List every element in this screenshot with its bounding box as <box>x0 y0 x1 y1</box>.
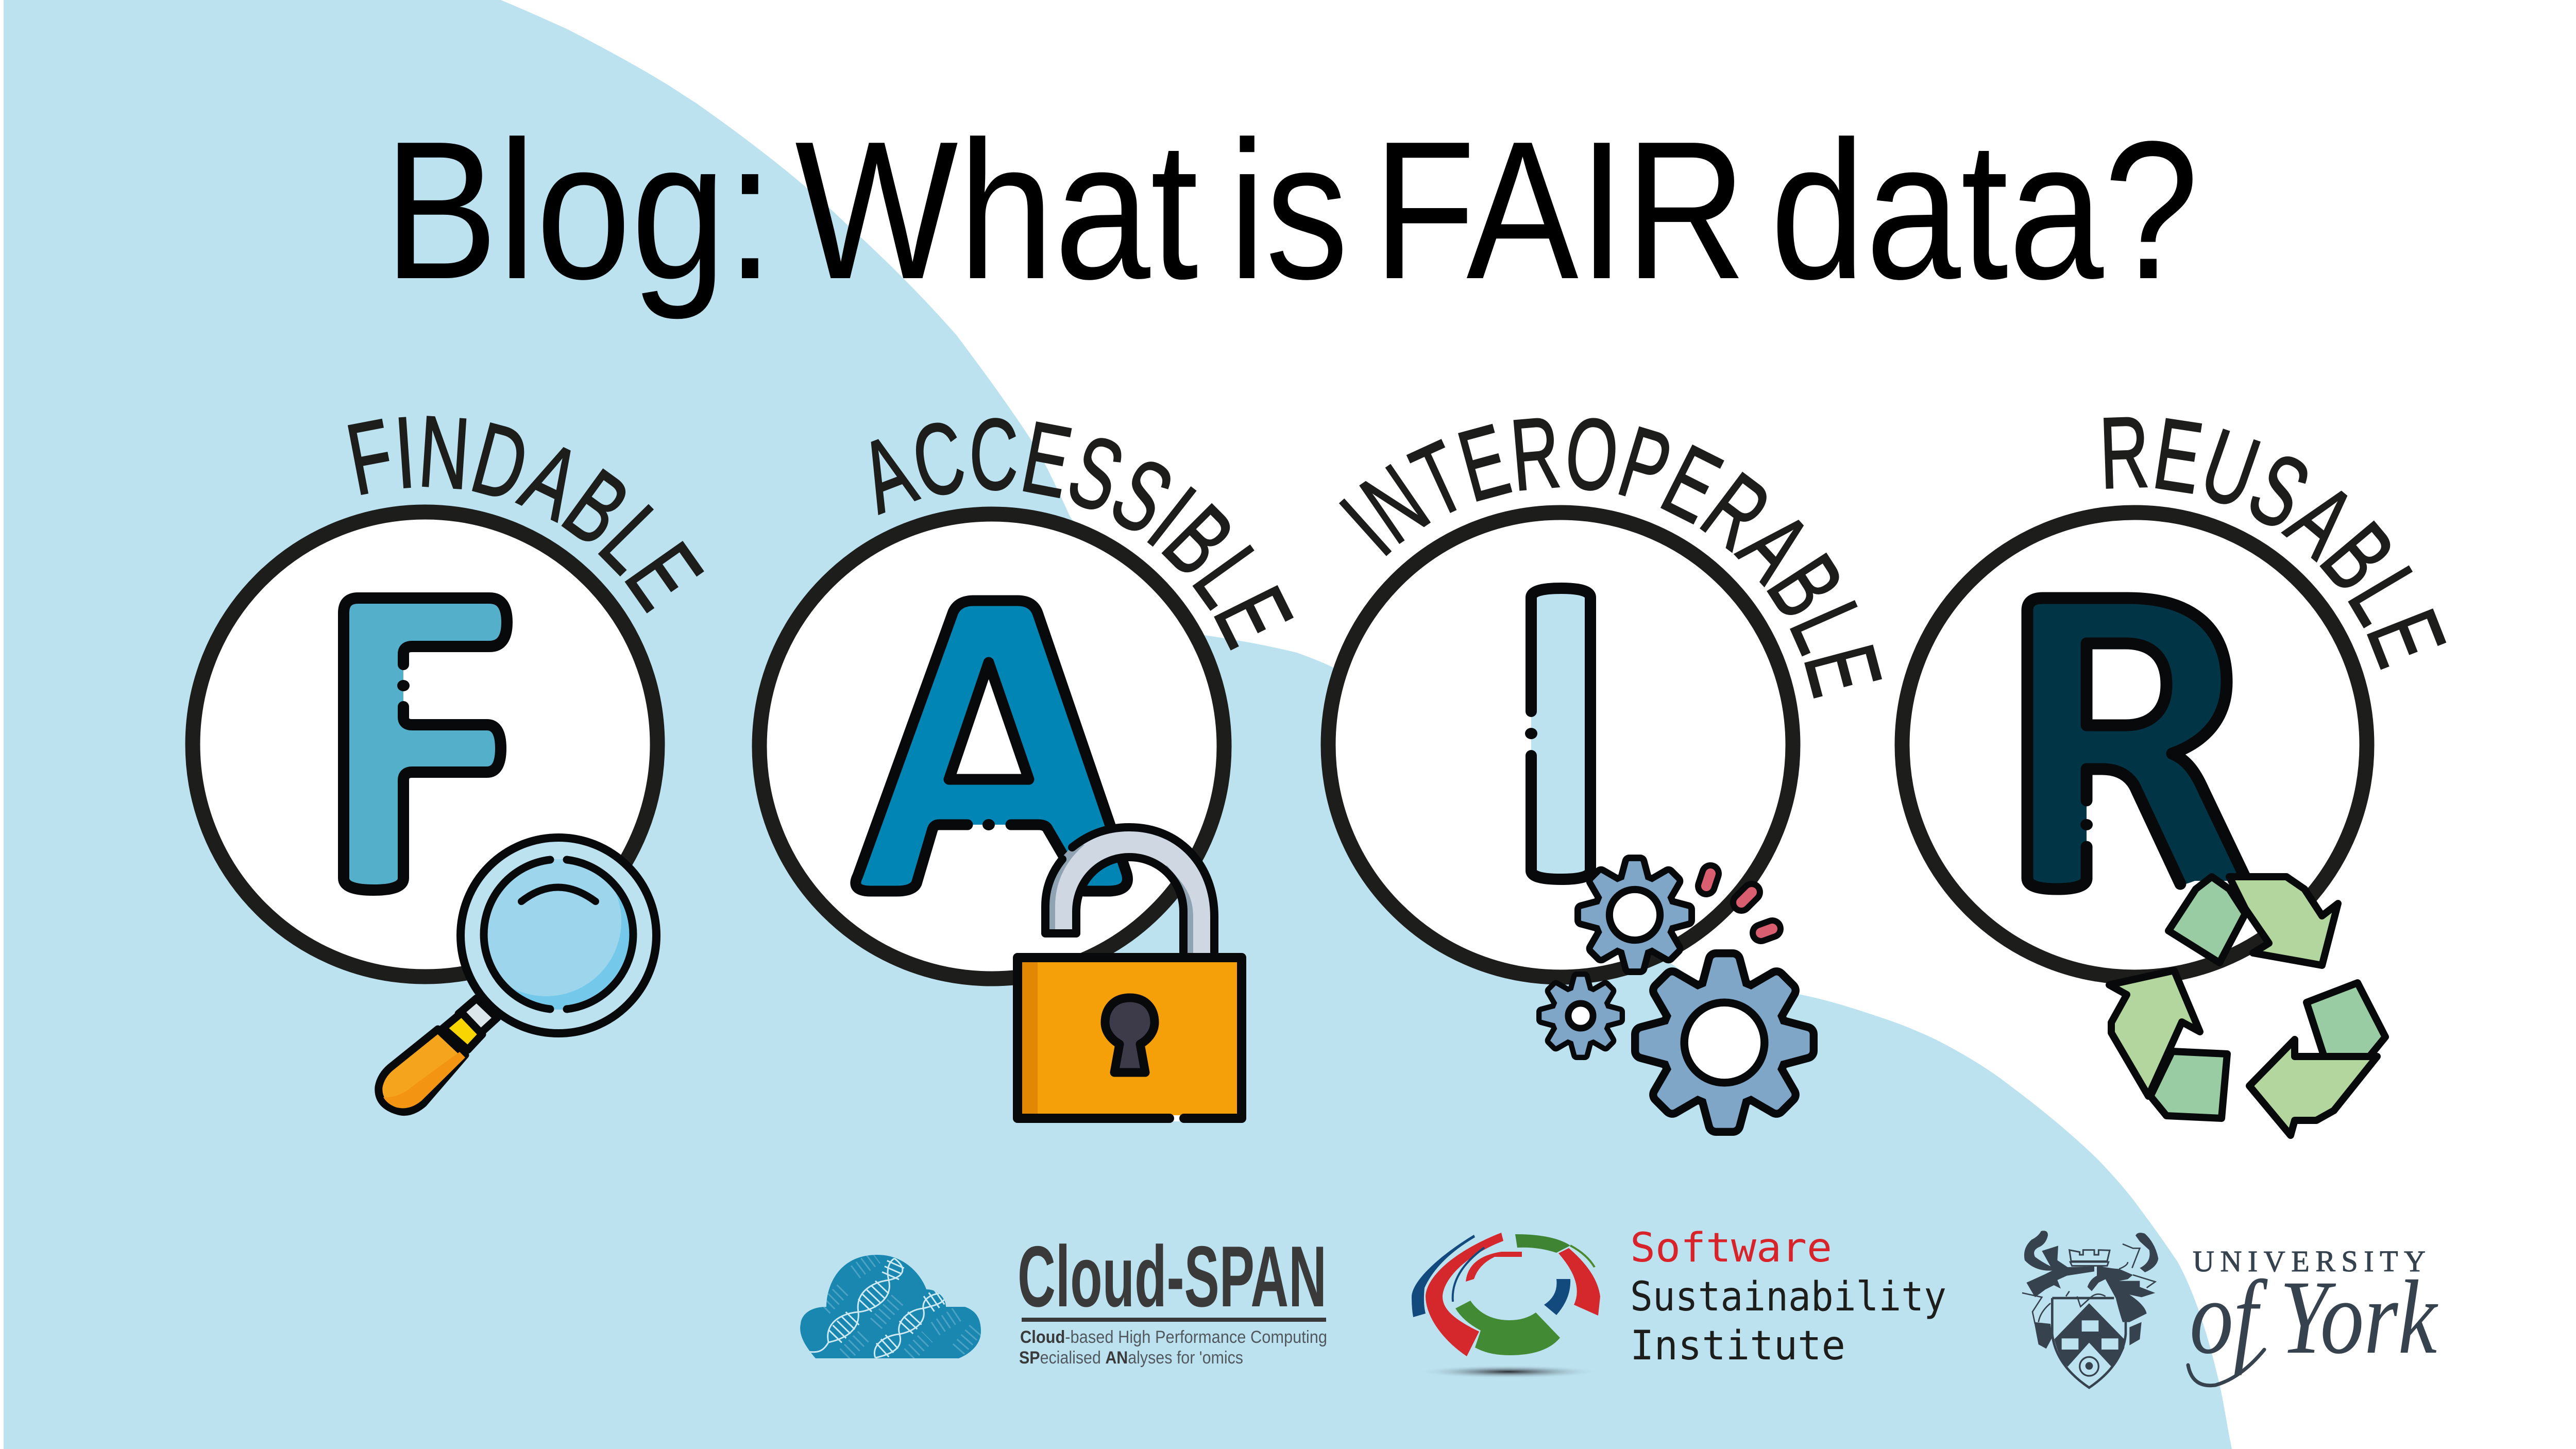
letter F <box>344 598 507 890</box>
letter R <box>2027 598 2247 889</box>
of York script: of York <box>2190 1259 2438 1376</box>
panel: findable <box>185 416 704 1116</box>
panel: reusable <box>1895 417 2446 1139</box>
label: reusable: REUSABLE <box>2104 417 2446 670</box>
panel: accessible <box>752 418 1294 1123</box>
keyhole <box>1105 998 1155 1072</box>
circle: findable <box>193 512 657 977</box>
label: accessible: ACCESSIBLE <box>871 418 1294 651</box>
tiny gear <box>1541 977 1620 1055</box>
left arrow <box>2109 970 2227 1118</box>
SSI text: Software <box>1630 1225 1832 1271</box>
title: is <box>1229 100 1348 320</box>
tagline: Cloud-based High Performance Computing <box>1020 1327 1327 1347</box>
tagline: SPecialised ANalyses for 'omics <box>1019 1348 1243 1368</box>
shackle <box>1045 827 1214 958</box>
title: data? <box>1770 100 2199 320</box>
circle: accessible <box>759 514 1224 979</box>
logo: Software Sustainability Institute <box>1412 1225 1946 1378</box>
university wordmark: UNIVERSITY <box>2193 1245 2426 1278</box>
logo: University of York <box>2022 1231 2438 1388</box>
title: Blog: <box>384 100 774 321</box>
letter I <box>1525 588 1590 879</box>
SSI rings <box>1412 1233 1601 1378</box>
circle: reusable <box>1902 513 2367 977</box>
letter A <box>856 601 1127 891</box>
panel: interoperable <box>1321 418 1924 1136</box>
SSI text <box>1630 1225 1946 1369</box>
top arrow <box>2168 877 2338 965</box>
title: FAIR <box>1373 100 1747 320</box>
logo: Cloud-SPAN <box>800 1228 1327 1368</box>
label: interoperable: INTEROPERABLE <box>1339 418 1882 698</box>
lock body <box>1018 958 1242 1121</box>
wordmark: Cloud-SPAN <box>1018 1228 1327 1325</box>
circle: interoperable <box>1328 513 1793 977</box>
coat of arms <box>2022 1231 2158 1388</box>
small gear <box>1582 862 1688 968</box>
tagline <box>1019 1327 1327 1368</box>
icon: gears <box>1541 862 1806 1124</box>
icon: magnifying glass <box>379 838 656 1112</box>
cloud DNA icon <box>800 1255 981 1358</box>
big gear <box>1642 961 1806 1124</box>
label: findable: FINDABLE <box>347 416 704 613</box>
icon: padlock <box>1018 827 1242 1121</box>
SSI text: Sustainability <box>1630 1274 1946 1320</box>
title: What <box>795 100 1199 320</box>
SSI text: Institute <box>1630 1323 1845 1369</box>
sparks <box>1706 874 1772 933</box>
right arrow <box>2249 983 2385 1135</box>
York swash <box>2188 1350 2264 1386</box>
icon: recycling arrows <box>2109 877 2385 1135</box>
rule <box>1022 1318 1326 1322</box>
